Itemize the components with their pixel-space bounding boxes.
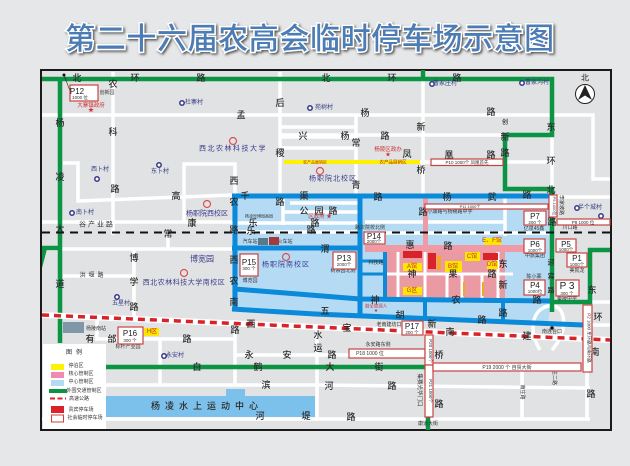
road labels: 路 xyxy=(418,206,428,217)
road labels: 青 xyxy=(351,179,361,190)
road labels xyxy=(55,72,603,422)
road labels: 路 xyxy=(129,301,139,312)
parking P4: 1000位 xyxy=(528,288,543,294)
road labels: 路 xyxy=(486,149,496,160)
parking P15: P15 xyxy=(242,258,257,267)
road labels: 滨 xyxy=(261,379,271,390)
road labels: 神 xyxy=(370,294,380,305)
road labels: 道 xyxy=(55,278,65,289)
road labels: 农 xyxy=(229,275,239,286)
road labels: 谷产业路 xyxy=(79,220,115,228)
road labels: 果 xyxy=(448,269,458,279)
road labels: 新 xyxy=(416,121,426,132)
parking P16: 300 个 xyxy=(123,338,137,343)
parking P6: P6 xyxy=(530,240,540,249)
road labels: 路 xyxy=(498,307,508,318)
road labels: 大 xyxy=(55,223,65,234)
road labels: 杨 xyxy=(340,130,350,141)
other landmarks: 亿泉45鑫 xyxy=(524,225,544,232)
road labels: 路 xyxy=(328,205,338,216)
parking P4 xyxy=(524,280,545,295)
parking P1 xyxy=(567,253,587,267)
parking P4: P4 xyxy=(530,281,540,290)
parking P7 xyxy=(524,211,546,225)
road labels: 康 xyxy=(187,217,197,228)
parking P9: P9 1000位 xyxy=(552,197,558,215)
other landmarks: 路次院校北侧 xyxy=(355,224,385,231)
road labels: 乐 xyxy=(246,225,256,236)
village markers xyxy=(70,78,603,359)
road labels: 桥 xyxy=(416,164,426,175)
other landmarks: 杨凌世博园高园 xyxy=(245,212,273,218)
road labels: 西 xyxy=(229,255,239,265)
village markers: 苑树村 xyxy=(315,103,333,111)
other landmarks: 秦陵中学 xyxy=(557,295,577,302)
road labels: 西 xyxy=(229,176,239,186)
road labels: 迎 xyxy=(548,258,554,266)
parking P7: P7 xyxy=(530,212,540,221)
road labels: 常 xyxy=(163,228,173,239)
other landmarks: 康庄二路 xyxy=(551,365,558,385)
road labels: 新 xyxy=(498,279,508,290)
road labels: 惠 xyxy=(405,239,415,250)
road labels: 后 xyxy=(275,98,285,108)
road labels: 高 xyxy=(171,190,181,201)
road labels: 常 xyxy=(351,137,361,148)
other landmarks: ★ xyxy=(88,107,94,114)
parking P10 xyxy=(431,159,503,166)
other landmarks: 汽车站 xyxy=(242,238,258,245)
road labels: 学 xyxy=(129,276,139,287)
road labels: 路 xyxy=(586,388,596,399)
water sports centre: 杨凌水上运动中心 xyxy=(151,400,263,411)
parking P10: P10 1000个 凤凰首先 xyxy=(445,159,489,166)
road labels: 路 xyxy=(230,324,240,335)
village markers: 杜寨村 xyxy=(185,98,203,106)
other landmarks: 永安路东侧 xyxy=(365,341,391,348)
road labels: 环 xyxy=(546,156,556,166)
road labels: 路 xyxy=(547,216,557,227)
road labels: 东 xyxy=(498,258,508,269)
road labels: 路 xyxy=(306,224,316,235)
road labels: 乐 xyxy=(248,217,258,228)
parking P14 xyxy=(364,232,385,244)
road labels: 胡 xyxy=(395,309,405,320)
other landmarks: 农产品展销区 xyxy=(380,158,407,166)
road labels: 白 xyxy=(192,361,202,372)
parking P17 xyxy=(402,321,423,335)
parking P18: P18 1000 位 xyxy=(356,350,384,357)
road labels: 博 xyxy=(129,252,139,263)
other landmarks: 火车站 xyxy=(277,238,293,245)
road labels: 宾 xyxy=(548,272,554,280)
road labels: 武 xyxy=(487,191,497,202)
parking P9 xyxy=(549,195,558,217)
road labels: 路 xyxy=(310,217,320,228)
central control zone xyxy=(232,195,552,326)
white roads xyxy=(42,72,610,419)
parking P13 xyxy=(333,252,356,269)
road labels: 渠 xyxy=(299,190,309,201)
other landmarks: 云谷公寓 xyxy=(557,241,577,248)
road labels: 西 xyxy=(246,319,256,329)
pink core control zone xyxy=(365,198,525,298)
parking P20: P20 1000个 xyxy=(428,339,433,363)
school markers and names: 杨职院南校区 xyxy=(262,260,310,268)
other landmarks: 南庄路 xyxy=(519,384,526,400)
other landmarks: 渤全管源人 xyxy=(365,302,388,310)
road labels: 路 xyxy=(182,333,192,344)
other landmarks: 科技路 xyxy=(368,259,384,266)
road labels: 北 xyxy=(546,185,556,195)
road labels: 环 xyxy=(130,73,140,83)
other landmarks: 标杆产业园 xyxy=(115,343,141,350)
road labels: 路 xyxy=(522,189,532,200)
road labels: 路 xyxy=(196,72,206,83)
road labels: 杨 xyxy=(55,117,65,128)
parking P2: P2 1000 东环路与南环路 xyxy=(586,313,592,363)
road labels: 创 xyxy=(502,118,508,126)
yellow exhibition halls: G区 xyxy=(407,287,417,294)
compass xyxy=(576,74,594,104)
parking P11 xyxy=(425,204,548,209)
yellow exhibition halls: C馆 xyxy=(467,252,477,260)
other landmarks: ★ xyxy=(374,308,378,312)
other landmarks: 创新园 xyxy=(99,89,115,96)
yellow exhibition halls: B馆 xyxy=(448,262,458,270)
road labels: 公 xyxy=(299,206,309,216)
road labels: 稷 xyxy=(275,147,285,158)
other landmarks: 农产品展销区 xyxy=(303,158,327,164)
village markers: 东卜村 xyxy=(151,167,169,175)
road labels: 东 xyxy=(546,121,556,132)
other landmarks: 老南建坊口 xyxy=(376,321,402,328)
title: 第二十六届农高会临时停车场示意图 xyxy=(65,23,555,56)
road labels: 路 xyxy=(346,411,356,422)
parking P15: 300 个 xyxy=(242,266,256,271)
road labels: 环 xyxy=(593,312,603,322)
road labels: 南 xyxy=(445,326,455,337)
compass: 北 xyxy=(581,74,589,82)
legend xyxy=(43,344,106,429)
legend: 图例 xyxy=(66,348,86,356)
road labels: 凌 xyxy=(55,171,65,182)
legend: 外围交通管制区 xyxy=(66,387,102,394)
road labels: 东 xyxy=(587,284,597,295)
road labels: 河 xyxy=(324,380,334,391)
school markers and names xyxy=(143,138,357,286)
map frame xyxy=(41,70,611,430)
road labels: 农 xyxy=(108,78,118,89)
road labels: 北 xyxy=(72,73,82,83)
village markers: 西卜村 xyxy=(91,165,109,173)
VIP parking red blocks xyxy=(403,251,498,269)
parking P19 xyxy=(433,363,581,371)
road labels: 邰 xyxy=(107,333,117,344)
road labels: 凰 xyxy=(444,150,454,160)
yellow exhibition halls: H区 xyxy=(147,328,157,335)
road labels: 园 xyxy=(314,206,324,216)
road labels: 科 xyxy=(108,126,118,137)
road labels: 兴 xyxy=(298,131,308,141)
other landmarks: 李家坡路 xyxy=(558,195,565,215)
road labels: 大 xyxy=(325,361,335,372)
green traffic control roads xyxy=(42,70,610,430)
legend: 贵宾停车场 xyxy=(68,406,94,413)
other landmarks: 小康路与杨稷路中学 xyxy=(427,208,473,215)
parking P16: P16 xyxy=(123,329,138,338)
parking P12: P12 xyxy=(70,87,85,96)
village markers: 曹家庄村 xyxy=(433,79,457,87)
other landmarks: 集赛光华门口 xyxy=(416,373,424,407)
parking P16 xyxy=(118,327,143,344)
parking P1: 1000个 xyxy=(570,262,585,267)
road labels: 农 xyxy=(229,196,239,207)
parking P3: 300 个 xyxy=(560,291,574,296)
school markers and names: 博宽园 xyxy=(190,254,214,264)
parking P5: P5 xyxy=(561,240,571,249)
road labels: 凤 xyxy=(402,149,412,159)
road labels: 路 xyxy=(229,224,239,235)
road labels: 路 xyxy=(327,349,337,360)
other landmarks xyxy=(63,89,585,427)
parking P14: P14 xyxy=(367,232,382,241)
other landmarks: 杨陵南站 xyxy=(86,325,106,332)
parking P17: P17 xyxy=(405,322,420,331)
parking P14: 2000个 xyxy=(367,239,382,244)
road labels: 路 xyxy=(532,294,542,305)
road labels: 洪堰路 xyxy=(79,271,107,279)
parking P3: P 3 xyxy=(560,281,575,292)
road labels: 环 xyxy=(387,73,397,83)
village markers: 南卜村 xyxy=(76,208,94,216)
road labels: 农 xyxy=(451,294,461,305)
blue control roads xyxy=(232,196,583,325)
parking P15 xyxy=(240,254,258,276)
road labels: 运 xyxy=(313,343,323,353)
parking P8: P8 1000 位 xyxy=(572,219,595,225)
road labels: 桥 xyxy=(434,349,444,360)
road labels: 路 xyxy=(452,72,462,83)
road labels: 五 xyxy=(320,306,330,316)
road labels: 路 xyxy=(443,240,453,251)
village markers: 曹家沟村 xyxy=(525,78,549,86)
road labels: 路 xyxy=(477,314,487,325)
parking P3 xyxy=(556,280,579,296)
road labels: 孟 xyxy=(236,110,246,120)
road labels: 杨 xyxy=(360,107,370,118)
other landmarks: 康道大街 xyxy=(418,420,438,427)
road labels: 永 xyxy=(244,349,254,360)
road labels: 河 xyxy=(255,410,265,421)
school markers and names: 西北农林科技大学南校区 xyxy=(143,278,225,286)
railway dashed line xyxy=(42,232,610,234)
parking P11: P11 1000个 xyxy=(460,204,480,209)
other landmarks: 大寨镇政府 xyxy=(77,101,105,109)
other landmarks: 美凯龙 xyxy=(569,267,585,274)
other landmarks: 杨陵区政办 xyxy=(374,145,402,153)
road labels: 路 xyxy=(486,106,496,117)
road labels: 路 xyxy=(275,196,285,207)
road labels: 水 xyxy=(313,329,323,340)
road labels: 路 xyxy=(380,130,390,141)
road labels: 千 xyxy=(240,191,250,201)
village markers: 半个城村 xyxy=(578,203,602,211)
road labels: 安 xyxy=(282,349,292,360)
parking P2 xyxy=(583,305,592,372)
pointer to P12 xyxy=(62,74,70,91)
legend: 中心管制区 xyxy=(68,378,94,385)
yellow exhibition halls: A馆 xyxy=(407,262,417,270)
road labels: 路 xyxy=(548,286,554,294)
parking P21: P21 1000个 xyxy=(428,379,433,403)
commercial highway red dashed line xyxy=(42,315,610,340)
other landmarks: 树系园北侧 xyxy=(330,267,356,274)
parking P1: P1 xyxy=(572,254,582,263)
parking P20 xyxy=(425,335,433,365)
road labels: 堤 xyxy=(301,410,311,421)
parking P21 xyxy=(425,365,433,417)
other landmarks: 陈小寨 xyxy=(526,273,542,280)
parking P6 xyxy=(524,239,545,253)
road labels: 街 xyxy=(374,361,384,372)
yellow exhibition halls: D馆 xyxy=(487,260,497,268)
road labels: 南 xyxy=(590,346,600,357)
legend: 核心管制区 xyxy=(68,370,94,377)
legend: 停泊区 xyxy=(68,362,84,369)
parking P18 xyxy=(349,349,425,358)
school markers and names: 杨职院西校区 xyxy=(186,208,228,218)
water sports centre xyxy=(106,389,315,417)
road labels: 路 xyxy=(487,268,497,279)
school markers and names: 西北农林科技大学 xyxy=(199,144,267,152)
road labels: 神 xyxy=(407,268,417,279)
green wedge at left edge xyxy=(42,249,47,268)
yellow exhibition halls: E、F馆 xyxy=(482,236,502,244)
other landmarks: 博览园 xyxy=(242,277,258,284)
parking P19: P19 2000 个 自贸大街 xyxy=(482,364,532,371)
other landmarks: 区政府 ★ xyxy=(308,212,332,220)
parking P12: 1000 位 xyxy=(72,94,88,100)
road labels: 杨 xyxy=(442,191,452,202)
parking P17: 200 个 xyxy=(405,330,419,335)
parking P13: P13 xyxy=(337,254,352,263)
parking P6: 1000个 xyxy=(528,248,543,253)
parking P8 xyxy=(557,219,610,225)
legend: 高速公路 xyxy=(69,395,89,402)
other landmarks: 中旅集团 xyxy=(525,252,545,259)
road labels: 建 xyxy=(522,330,532,341)
road labels: 宝 xyxy=(342,322,352,333)
parking P5 xyxy=(556,239,576,252)
parking P7: 200 个 xyxy=(528,220,542,225)
road labels: 有 xyxy=(85,333,95,344)
yellow exhibition halls xyxy=(144,160,502,336)
other landmarks: 南连合口 xyxy=(542,328,562,335)
road labels: 鹤 xyxy=(253,361,263,372)
road labels: 新 xyxy=(500,131,510,142)
village markers: 五星村 xyxy=(112,299,130,307)
legend: 社会临时停车场 xyxy=(67,414,103,421)
road labels: 渭 xyxy=(320,244,330,254)
road labels: 路 xyxy=(373,191,383,202)
village markers: 永安村 xyxy=(166,351,184,359)
road labels: 路 xyxy=(387,380,397,391)
road labels: 路 xyxy=(434,398,444,409)
parking P12 xyxy=(70,85,98,101)
school markers and names: 杨职院北校区 xyxy=(309,174,357,182)
road labels: 南 xyxy=(229,296,239,307)
parking P13: 2000个 xyxy=(337,262,352,267)
other landmarks: 川口路 xyxy=(562,224,578,231)
parking P5: 1000个 xyxy=(559,247,574,252)
road labels: 路 xyxy=(110,183,120,194)
road labels: 路 xyxy=(500,147,510,158)
other landmarks: ★ xyxy=(385,152,391,158)
road labels: 新 xyxy=(427,318,437,329)
road labels: 北 xyxy=(321,73,331,83)
